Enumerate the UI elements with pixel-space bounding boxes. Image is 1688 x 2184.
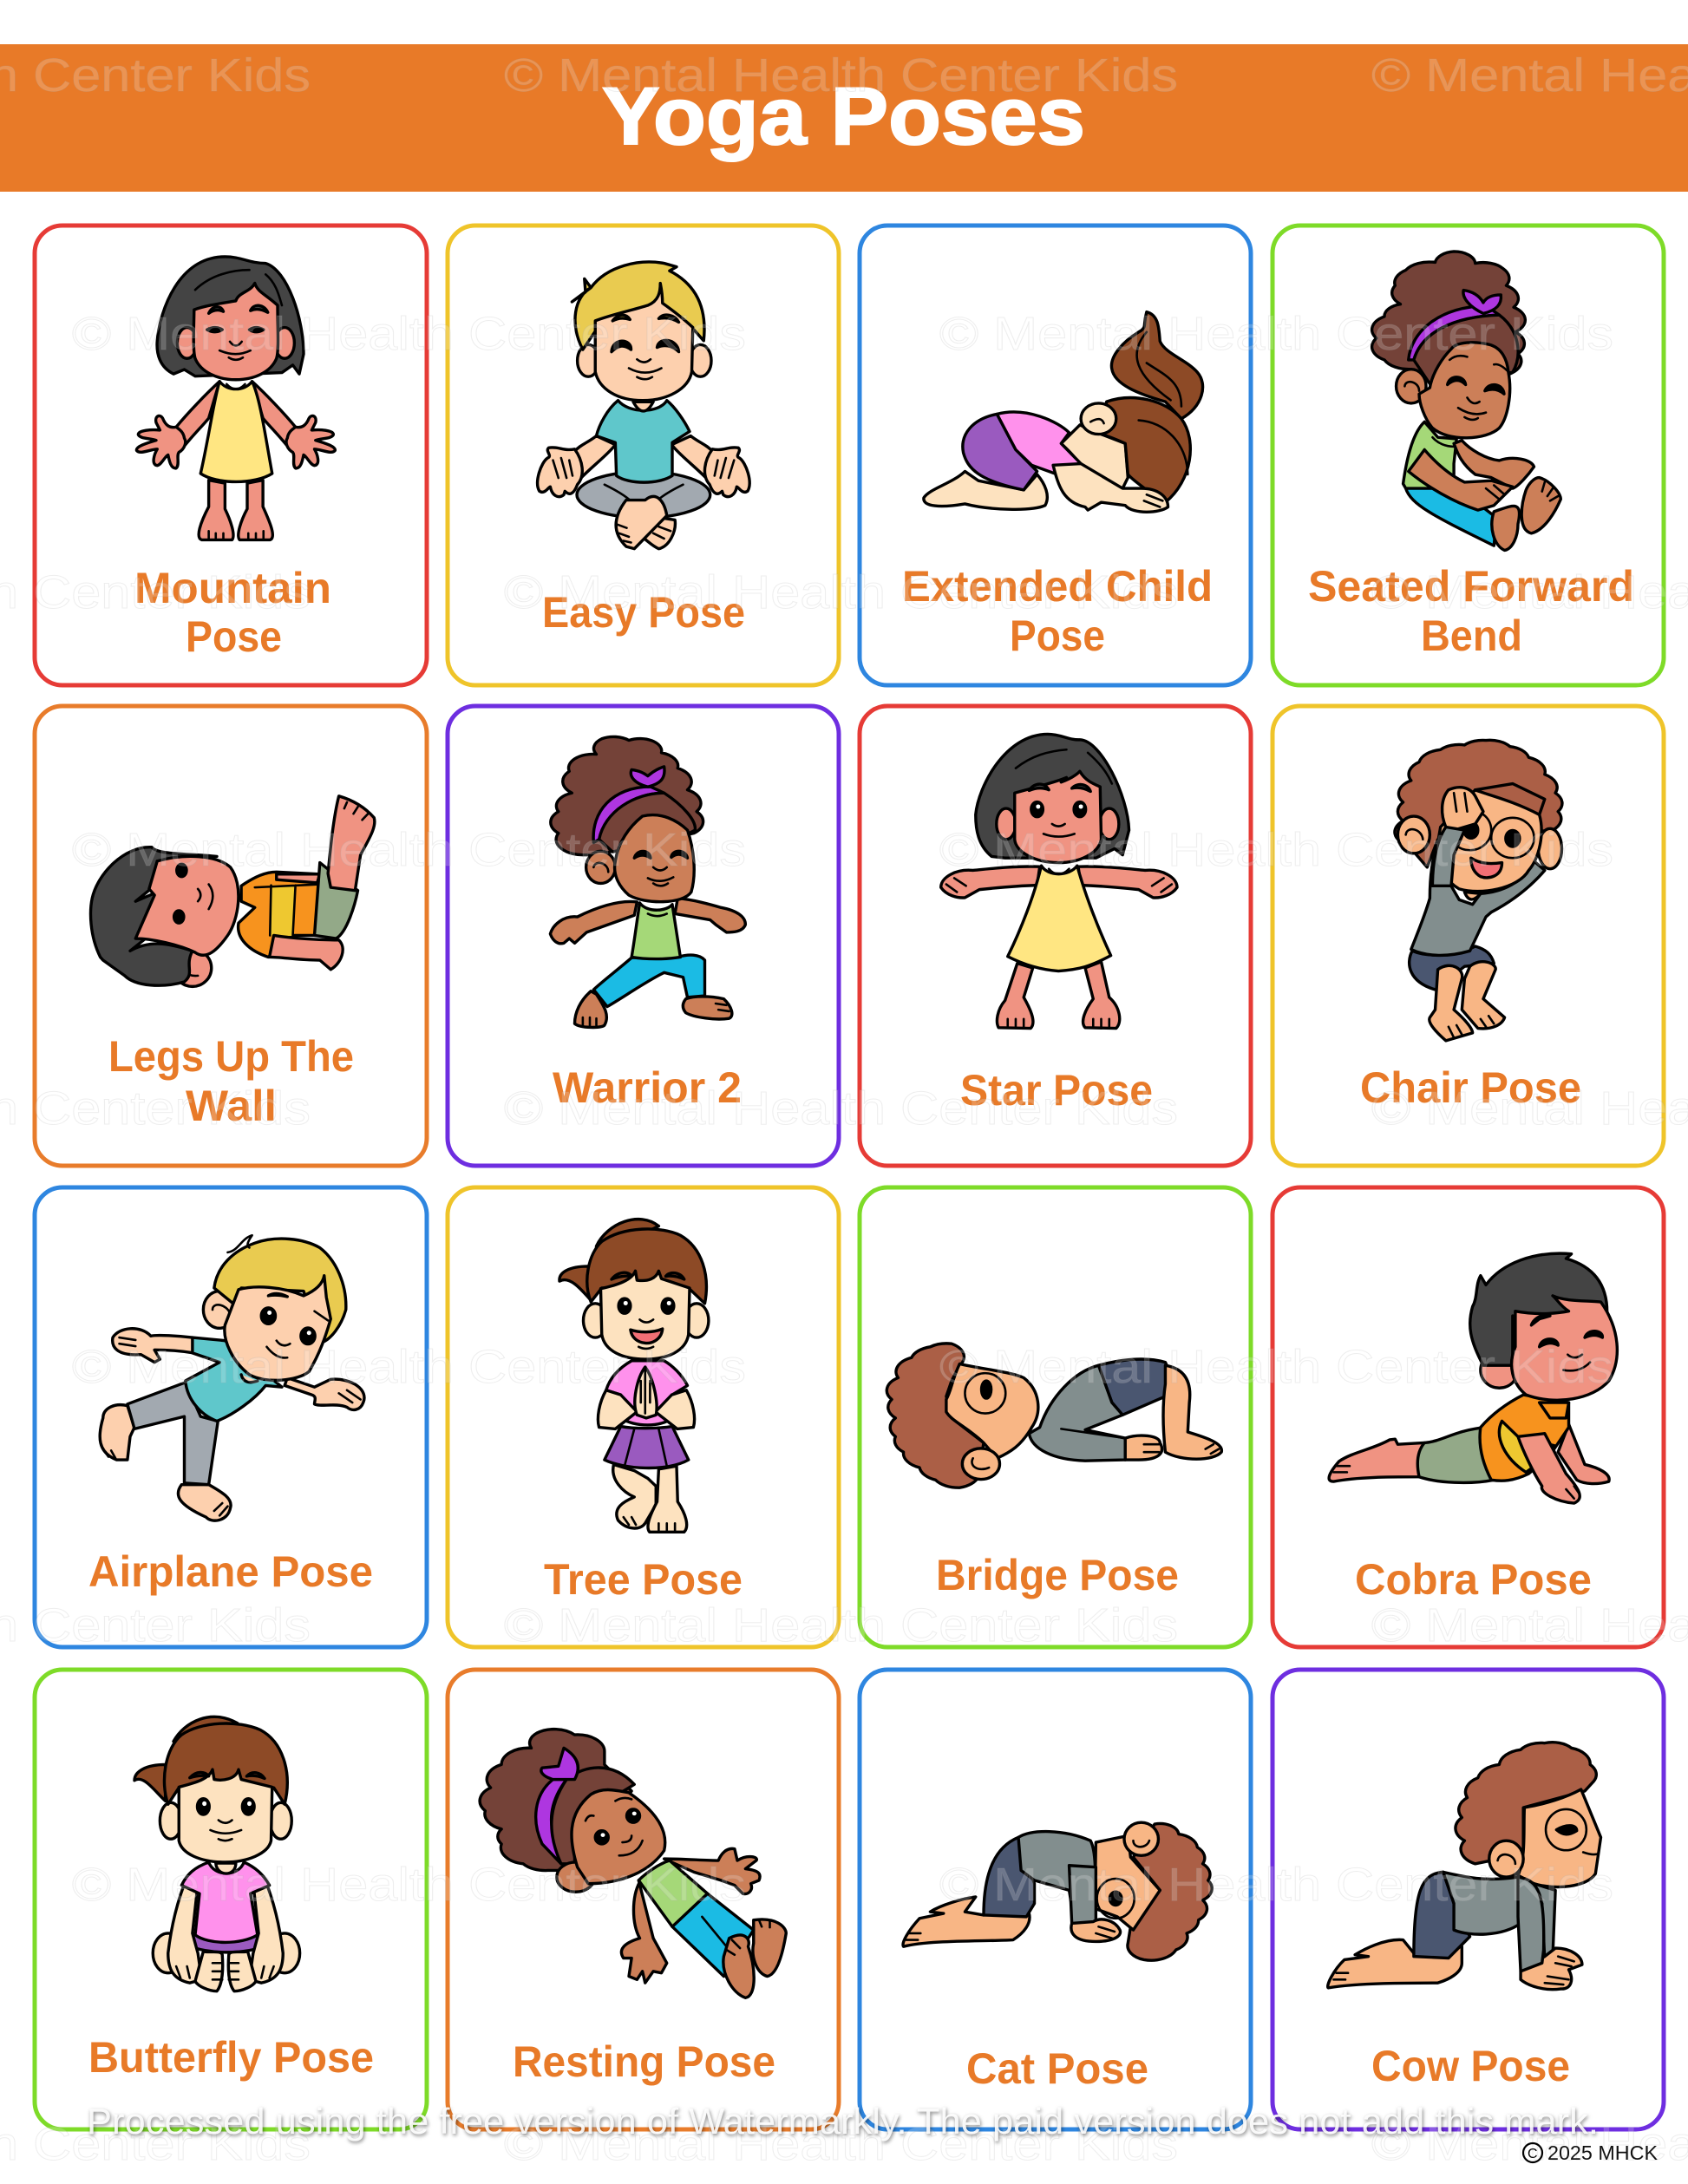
label: Resting Pose — [513, 2037, 775, 2086]
header band — [0, 44, 1688, 192]
label: Star Pose — [960, 1066, 1153, 1115]
watermark rows: © Mental Health Center Kids — [72, 1341, 746, 1393]
icon: child curled forward in child's pose — [924, 312, 1203, 512]
label: Chair Pose — [1360, 1063, 1581, 1112]
panel: Star Pose — [860, 706, 1251, 1166]
icon: girl with afro in warrior stance — [550, 736, 745, 1027]
panel: Warrior 2 — [448, 706, 839, 1166]
panel: Resting Pose — [448, 1670, 839, 2129]
watermark rows: © Mental Health Center Kids — [504, 566, 1178, 618]
label: Butterfly Pose — [88, 2033, 374, 2082]
label: Warrior 2 — [553, 1063, 742, 1112]
label: Wall — [186, 1082, 277, 1130]
copyright: C — [1528, 2147, 1538, 2161]
icon: boy on hands and knees with rounded back — [903, 1822, 1212, 1960]
panel: Cat Pose — [860, 1670, 1251, 2129]
panel: Butterfly Pose — [35, 1670, 427, 2129]
watermark rows: © Mental Health Center Kids — [504, 2118, 1178, 2170]
icon: girl lying on her back relaxed — [480, 1730, 786, 1998]
label: Mountain — [134, 564, 331, 612]
icon: girl in purple skirt with palms together — [559, 1220, 709, 1532]
label: Cow Pose — [1371, 2042, 1570, 2090]
watermark rows: © Mental Health Center Kids — [72, 824, 746, 876]
watermark rows: © Mental Health Center Kids — [939, 824, 1613, 876]
watermark rows: © Mental Health Center Kids — [72, 1859, 746, 1911]
icon: boy lying down with legs raised — [91, 796, 375, 986]
label: Cat Pose — [966, 2044, 1148, 2093]
panel: Legs Up The Wall — [35, 706, 427, 1166]
panel: Easy Pose — [448, 226, 839, 685]
icon: boy with glasses arching in bridge — [887, 1344, 1221, 1488]
label: Pose — [1010, 611, 1105, 660]
icon: blond boy sitting cross-legged — [538, 262, 749, 549]
label: Extended Child — [902, 562, 1213, 611]
label: Pose — [186, 612, 282, 661]
label: Tree Pose — [544, 1555, 743, 1604]
panel: Seated Forward Bend — [1273, 226, 1664, 685]
label: Cobra Pose — [1355, 1555, 1592, 1604]
icon: boy lying prone with chest lifted — [1329, 1253, 1617, 1503]
icon: boy on hands and knees with lifted head — [1328, 1743, 1600, 1990]
watermark rows: © Mental Health Center Kids — [504, 49, 1178, 101]
panel: Cow Pose — [1273, 1670, 1664, 2129]
panel: Bridge Pose — [860, 1187, 1251, 1647]
icon: blond boy balancing on one leg with arms out — [100, 1235, 364, 1520]
icon: girl with afro reaching for toes — [1372, 252, 1560, 550]
panel: Cobra Pose — [1273, 1187, 1664, 1647]
watermark rows: © Mental Health Center Kids — [72, 308, 746, 360]
icon: girl standing with arms and legs spread — [941, 734, 1177, 1029]
label: Airplane Pose — [88, 1547, 373, 1596]
panel: Airplane Pose — [35, 1187, 427, 1647]
title: Yoga Poses — [602, 70, 1085, 161]
label: Legs Up The — [108, 1032, 354, 1081]
label: Bridge Pose — [936, 1551, 1179, 1599]
panel: Mountain Pose — [35, 226, 427, 685]
icon: girl seated with soles of feet together — [134, 1716, 300, 1991]
watermark rows: © Mental Health Center Kids — [939, 1341, 1613, 1393]
label: Bend — [1421, 611, 1522, 660]
copyright: 2025 MHCK — [1547, 2141, 1659, 2164]
label: Easy Pose — [542, 588, 745, 637]
panel: Chair Pose — [1273, 706, 1664, 1166]
watermark rows: © Mental Health Center Kids — [504, 1082, 1178, 1135]
processing notice: Processed using the free version of Watermarkly. The paid version does not add this mark. — [87, 2101, 1599, 2141]
icon: boy with glasses squatting, hands raised — [1395, 740, 1562, 1041]
watermark rows: © Mental Health Center Kids — [504, 1599, 1178, 1651]
label: Seated Forward — [1308, 562, 1634, 611]
watermark rows: © Mental Health Center Kids — [939, 308, 1613, 360]
panel: Tree Pose — [448, 1187, 839, 1647]
watermark rows: © Mental Health Center Kids — [939, 1859, 1613, 1911]
panel: Extended Child Pose — [860, 226, 1251, 685]
icon: girl in yellow dress standing with open hands — [136, 257, 335, 539]
